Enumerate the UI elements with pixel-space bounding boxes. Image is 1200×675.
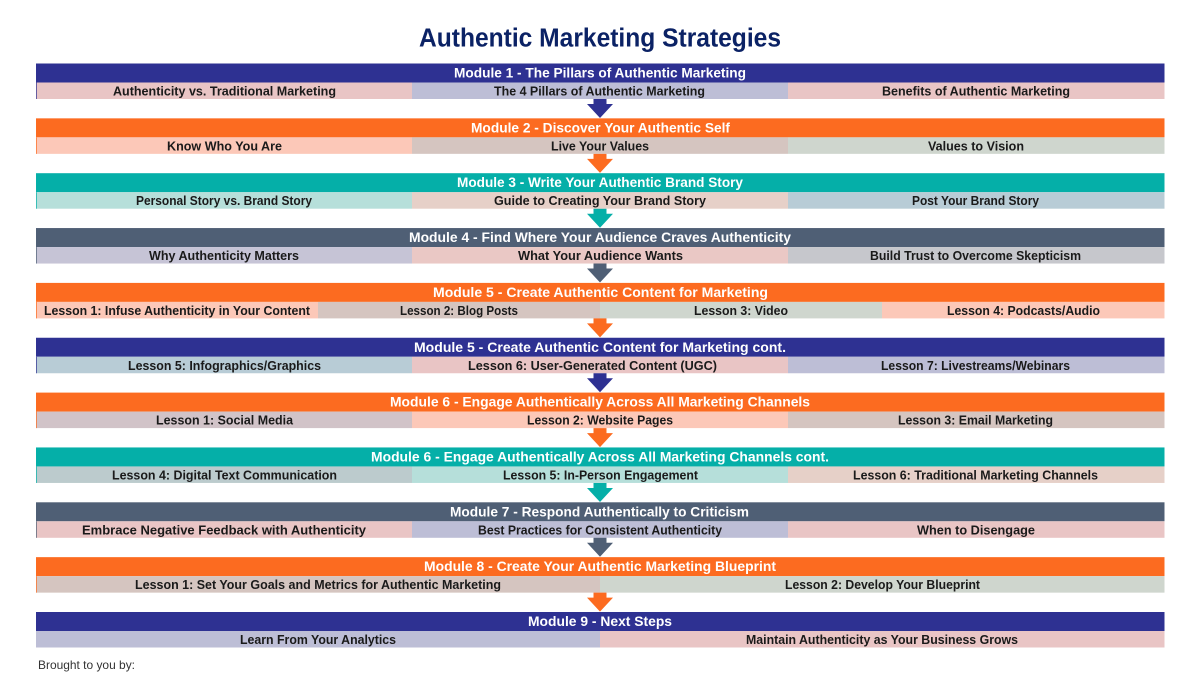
module 9 lessons (36, 631, 1164, 648)
module 7 lessons: Best Practices for Consistent Authenticity (478, 522, 723, 537)
arrow: module 4 to 5 (587, 264, 613, 283)
module 3 lessons: Personal Story vs. Brand Story (136, 193, 313, 208)
module 1 lessons: Benefits of Authentic Marketing (882, 84, 1070, 98)
arrow: module 3 to 4 (587, 209, 613, 228)
module 2 lessons: Values to Vision (928, 138, 1024, 153)
module 5 lessons: Lesson 4: Podcasts/Audio (947, 303, 1100, 318)
module 9 header (36, 612, 1164, 631)
module 6 cont lessons (36, 466, 1164, 483)
module 8 lessons (36, 576, 1164, 593)
module 6 cont header: Module 6 - Engage Authentically Across All Marketing Channels cont. (371, 448, 829, 464)
module 1 lessons (36, 82, 1164, 99)
module 6 cont header (36, 447, 1164, 466)
module 4 header: Module 4 - Find Where Your Audience Craves Authenticity (409, 229, 791, 245)
module 4 lessons: Why Authenticity Matters (149, 248, 299, 263)
module 3 lessons: Post Your Brand Story (912, 193, 1040, 208)
module 5 cont header: Module 5 - Create Authentic Content for Marketing cont. (414, 339, 786, 355)
module 8 header (36, 557, 1164, 576)
module 6 lessons (36, 412, 1164, 428)
arrow: module 6 cont to 7 (587, 483, 613, 502)
module 6 header (36, 393, 1164, 412)
module 2 lessons (36, 137, 1164, 154)
module 4 lessons: What Your Audience Wants (518, 248, 683, 263)
module 5 header (36, 283, 1164, 302)
arrow: module 2 to 3 (587, 154, 613, 173)
module 8 lessons: Lesson 1: Set Your Goals and Metrics for Authentic Marketing (135, 577, 501, 592)
panel: module 7 (36, 502, 1164, 557)
module 6 cont lessons: Lesson 6: Traditional Marketing Channels (853, 467, 1098, 482)
module 3 header (36, 173, 1164, 192)
arrow: module 8 to 9 (587, 593, 613, 612)
module 2 header: Module 2 - Discover Your Authentic Self (471, 119, 730, 135)
panel: module 6 cont (36, 447, 1164, 502)
module 5 cont header (36, 338, 1164, 357)
panel: module 6 (36, 393, 1164, 447)
module 5 cont lessons: Lesson 5: Infographics/Graphics (128, 358, 321, 373)
module 5 cont lessons: Lesson 7: Livestreams/Webinars (881, 358, 1070, 373)
module 6 header: Module 6 - Engage Authentically Across All Marketing Channels (390, 394, 810, 410)
module 5 cont lessons: Lesson 6: User-Generated Content (UGC) (468, 358, 717, 373)
module 6 cont lessons: Lesson 4: Digital Text Communication (112, 467, 337, 482)
arrow: module 1 to 2 (587, 99, 613, 118)
panel: module 8 (36, 557, 1164, 612)
module 4 header (36, 228, 1164, 247)
panel: module 9 (36, 612, 1164, 648)
module 3 lessons: Guide to Creating Your Brand Story (494, 193, 707, 208)
module 9 lessons: Learn From Your Analytics (240, 632, 396, 647)
module 7 lessons (36, 521, 1164, 538)
module 1 header: Module 1 - The Pillars of Authentic Marketing (454, 64, 746, 80)
module 6 lessons: Lesson 1: Social Media (156, 413, 294, 428)
panel: module 5 (36, 283, 1164, 337)
panel: module 4 (36, 228, 1164, 283)
module 4 lessons (36, 247, 1164, 264)
module 5 cont lessons (36, 357, 1164, 373)
module 8 header: Module 8 - Create Your Authentic Marketing Blueprint (424, 558, 776, 574)
module 2 lessons: Know Who You Are (167, 138, 282, 153)
arrow: module 5 to 5 cont (587, 318, 613, 337)
module 6 lessons: Lesson 2: Website Pages (527, 413, 673, 428)
module 2 header (36, 118, 1164, 137)
module 8 lessons: Lesson 2: Develop Your Blueprint (785, 577, 981, 592)
panel: module 3 (36, 173, 1164, 228)
arrow: module 6 to 6 cont (587, 428, 613, 447)
module 5 lessons: Lesson 3: Video (694, 303, 788, 318)
module 1 lessons: Authenticity vs. Traditional Marketing (113, 84, 336, 98)
module 9 lessons: Maintain Authenticity as Your Business Grows (746, 632, 1018, 647)
module 7 header: Module 7 - Respond Authentically to Criticism (450, 503, 749, 519)
panel: module 1 (36, 64, 1164, 118)
module 2 lessons: Live Your Values (551, 138, 649, 153)
module 1 lessons: The 4 Pillars of Authentic Marketing (494, 84, 705, 98)
module 6 lessons: Lesson 3: Email Marketing (898, 413, 1053, 428)
title: Authentic Marketing Strategies (419, 24, 781, 52)
panel: module 5 cont (36, 338, 1164, 392)
module 5 lessons: Lesson 1: Infuse Authenticity in Your Content (44, 303, 311, 318)
arrow: module 7 to 8 (587, 538, 613, 557)
module 7 lessons: When to Disengage (917, 522, 1035, 537)
module 5 lessons (36, 302, 1164, 318)
module 5 lessons: Lesson 2: Blog Posts (400, 303, 518, 318)
arrow: module 5 cont to 6 (587, 373, 613, 392)
module 1 header (36, 64, 1164, 82)
module 7 header (36, 502, 1164, 521)
module 4 lessons: Build Trust to Overcome Skepticism (870, 248, 1081, 263)
panel: module 2 (36, 118, 1164, 173)
module 3 header: Module 3 - Write Your Authentic Brand Story (457, 174, 743, 190)
module 3 lessons (36, 192, 1164, 209)
module 5 header: Module 5 - Create Authentic Content for Marketing (433, 284, 768, 300)
footer credit: Brought to you by: (38, 658, 135, 672)
module 6 cont lessons: Lesson 5: In-Person Engagement (503, 467, 699, 482)
module 9 header: Module 9 - Next Steps (528, 613, 672, 629)
module 7 lessons: Embrace Negative Feedback with Authenticity (82, 522, 367, 537)
